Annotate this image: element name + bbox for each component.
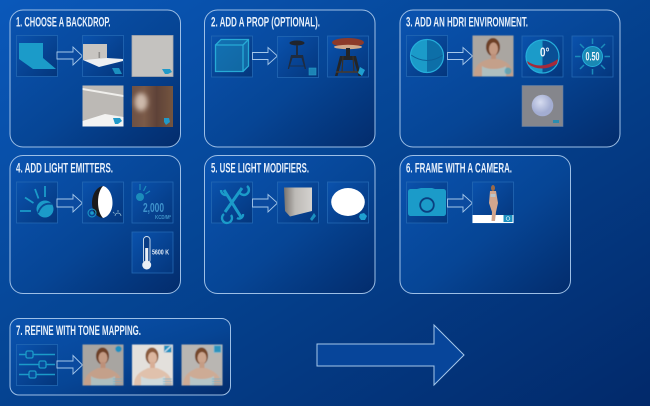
icon: sliders: [16, 344, 58, 386]
unit: luminance: KCD/M²: [155, 214, 171, 221]
image: portrait neutral: [182, 344, 222, 386]
value: rotation: 0°: [540, 46, 550, 60]
panel: frame with a camera: [400, 156, 570, 294]
arrow: large next: [317, 325, 464, 385]
icon: camera: [406, 182, 448, 223]
value: intensity: 0.50: [586, 50, 600, 64]
heading: step 3: 3. ADD AN HDRI ENVIRONMENT.: [406, 14, 528, 30]
image: stool small: [278, 36, 318, 78]
heading: step 7: 7. REFINE WITH TONE MAPPING.: [16, 322, 141, 338]
arrow: [252, 48, 278, 64]
panel: refine with tone mapping: [10, 318, 230, 395]
image: light box: [278, 182, 318, 223]
image: full figure: [472, 182, 514, 223]
icon: wrenches: [212, 182, 252, 223]
icon: intensity dial: [572, 36, 613, 77]
icon: sphere: [406, 36, 448, 76]
arrow: [57, 47, 82, 65]
image: grey ball: [522, 86, 563, 126]
panel: choose a backdrop: [10, 10, 180, 147]
panel: add light emitters: [10, 156, 180, 294]
arrow: [448, 194, 472, 212]
image: portrait exposure: [82, 344, 124, 386]
icon: backdrop: [16, 36, 58, 76]
arrow: [448, 48, 472, 64]
heading: step 6: 6. FRAME WITH A CAMERA.: [406, 160, 512, 176]
value: color temperature: 5600 K: [152, 248, 169, 256]
icon: luminance: [132, 182, 173, 223]
value: luminance: 2,000: [143, 200, 164, 215]
arrow: [57, 356, 82, 374]
icon: light: [16, 182, 58, 223]
image: backdrop grey: [132, 36, 173, 76]
image: white ellipse: [328, 182, 368, 223]
image: portrait bright: [132, 344, 173, 386]
image: stool large: [328, 36, 368, 77]
heading: step 5: 5. USE LIGHT MODIFIERS.: [211, 160, 309, 176]
image: hdri portrait: [472, 36, 514, 76]
heading: step 1: 1. CHOOSE A BACKDROP.: [16, 14, 110, 30]
panel: add an hdri environment: [400, 10, 620, 147]
icon: thermometer: [132, 232, 173, 273]
icon: cube: [212, 36, 252, 77]
image: backdrop room: [82, 86, 124, 126]
panel: use light modifiers: [204, 156, 375, 294]
image: softbox: [82, 182, 124, 223]
heading: step 4: 4. ADD LIGHT EMITTERS.: [16, 160, 113, 176]
image: backdrop render: [82, 36, 124, 76]
icon: rotation dial: [522, 36, 563, 77]
panel: add a prop: [204, 10, 375, 147]
arrow: [252, 194, 278, 212]
arrow: [57, 194, 82, 212]
heading: step 2: 2. ADD A PROP (OPTIONAL).: [211, 14, 320, 30]
image: backdrop wood: [132, 86, 173, 127]
